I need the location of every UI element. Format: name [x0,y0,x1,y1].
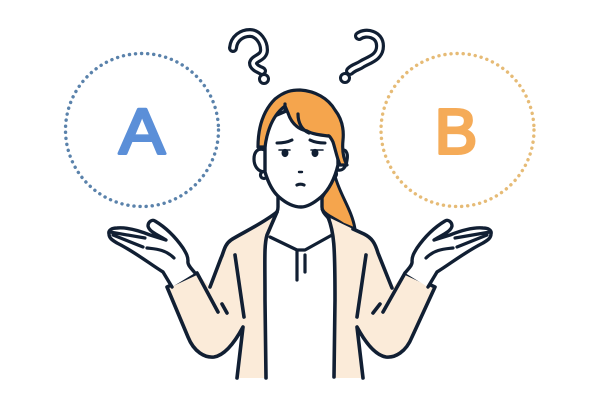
right hand [405,220,491,287]
facial features [277,140,325,185]
left question mark [233,33,268,84]
left hand [109,220,195,287]
option B circle: B [435,96,477,168]
left ear and earring [254,149,268,178]
hair [258,90,347,165]
jacket [167,212,435,378]
hair fringe strand [285,104,309,133]
right jacket panel [328,217,435,378]
right ear and earring [330,150,347,178]
face [265,105,338,207]
left jacket panel [167,212,277,378]
option A circle [66,54,218,206]
blouse neckline [270,235,332,280]
right question mark [340,34,380,82]
option A circle: A [119,97,166,168]
ponytail [322,176,355,229]
option B circle [381,54,534,206]
neck [274,195,329,219]
